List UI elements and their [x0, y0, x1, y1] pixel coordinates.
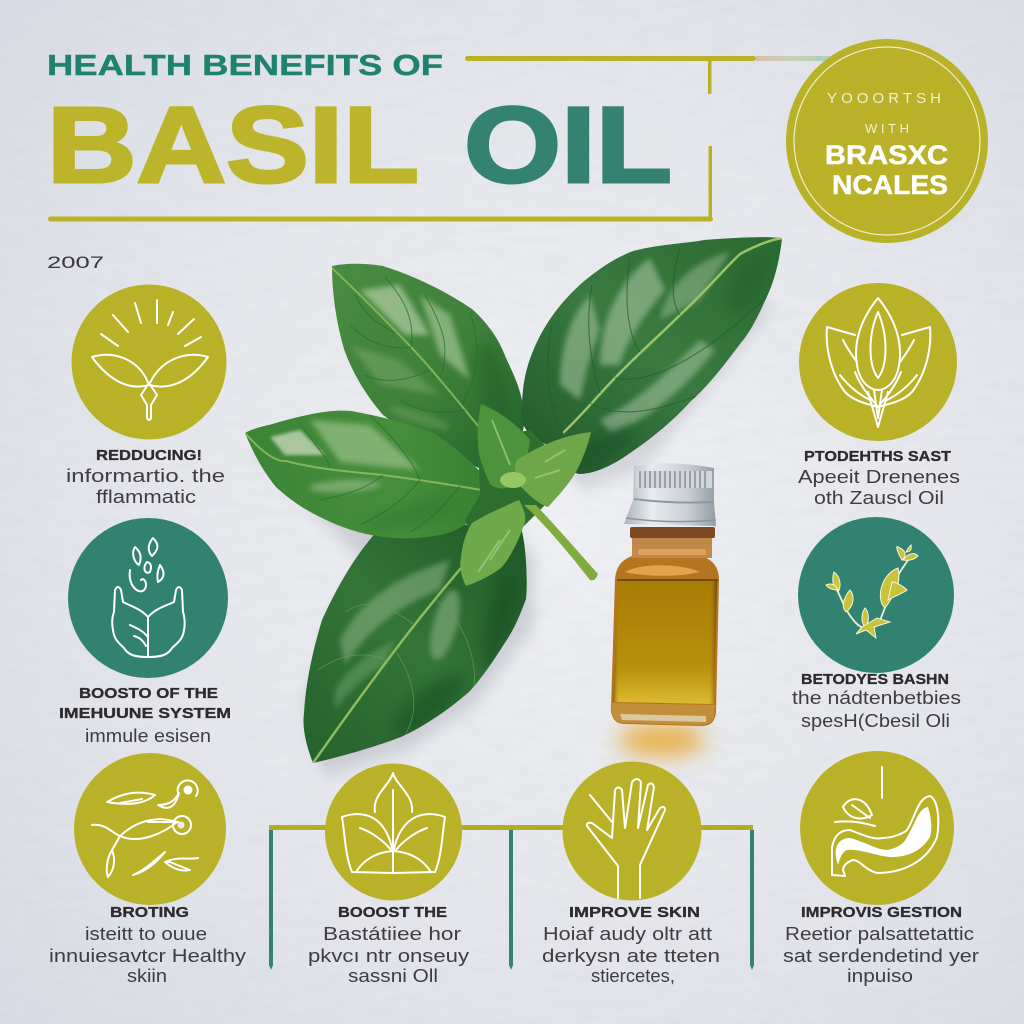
- subtitle: health benefits of: HEALTH BENEFITS OF: [47, 50, 443, 82]
- icon: hand: [562, 762, 702, 900]
- glass body: [611, 556, 719, 726]
- badge: BRASXC: [825, 140, 948, 170]
- leaf highlights: [478, 420, 565, 572]
- icon: stomach and leaf: [800, 751, 954, 905]
- panel: improve digestion: [783, 751, 979, 986]
- panel: reducing inflammation: fflammatic: [96, 487, 196, 507]
- icon: leaf cluster: [799, 283, 957, 441]
- highlight band: [625, 565, 700, 576]
- panel: improve digestion: sat serdendetind yer: [783, 946, 979, 966]
- glow under bottle: [618, 723, 706, 757]
- icon: leaf sprigs: [74, 753, 226, 905]
- panel: reducing inflammation: REDDUCING!: [96, 448, 202, 464]
- basil sprig: [240, 230, 790, 776]
- panel: boost the basil: sassni Oll: [348, 966, 438, 986]
- panel: protects: [798, 283, 960, 508]
- panel: boost the basil: Bastátiiee hor: [323, 924, 461, 944]
- panel: protects: oth Zauscl Oil: [814, 488, 944, 508]
- panel: boost immune system: BOOSTO OF THE: [79, 686, 218, 702]
- panel: boost immune system: [59, 518, 231, 746]
- year label: 2007: [47, 253, 104, 272]
- panel: boost immune system: immule esisen: [85, 726, 211, 746]
- panel: improve digestion: Reetior palsattetattic: [785, 924, 974, 944]
- oil bottle: [611, 463, 719, 757]
- badge: WITH: [865, 121, 909, 136]
- panel: protects: Apeeit Drenenes: [798, 467, 960, 487]
- title word: basil: BASIL: [47, 84, 419, 205]
- leaf: bottom: [304, 525, 527, 763]
- panel: botanical properties: BETODYES BASHN: [801, 672, 949, 688]
- sprig centre backing: [465, 430, 570, 560]
- panel: boost the basil: BOOOST THE: [338, 905, 447, 921]
- panel: botanical properties: the nádtenbetbies: [792, 688, 961, 708]
- oil liquid: [613, 581, 717, 704]
- panel: reducing inflammation: [66, 284, 226, 507]
- panel: improve skin: [542, 762, 720, 986]
- title word: oil: OIL: [464, 84, 672, 205]
- small leaf: lower: [460, 500, 525, 586]
- badge: [786, 39, 988, 243]
- sprig center bud: [500, 472, 526, 488]
- panel: botanical properties: [792, 517, 961, 731]
- small leaf: upper: [478, 404, 530, 488]
- panel: improve skin: stiercetes,: [591, 966, 675, 986]
- panel: protects: PTODEHTHS SAST: [804, 449, 951, 465]
- bottom connector: [269, 825, 754, 970]
- icon: hands and leaves: [68, 518, 228, 678]
- icon: leafy branch: [798, 517, 954, 673]
- badge: NCALES: [832, 170, 948, 200]
- panel: reducing inflammation: informartio. the: [66, 466, 225, 486]
- glass base: [612, 703, 715, 725]
- leaf: left: [245, 410, 480, 538]
- panel: improve skin: Hoiaf audy oltr att: [543, 924, 712, 944]
- amber neck: [630, 527, 715, 538]
- panel: improve digestion: inpuiso: [847, 966, 913, 986]
- panel: brightening skin: innuiesavtcr Healthy: [49, 946, 246, 966]
- panel: improve skin: derkysn ate tteten: [542, 946, 720, 966]
- small leaf: right: [515, 432, 591, 507]
- header frame lines: [48, 56, 830, 222]
- icon: sun and leaves: [72, 284, 226, 440]
- panel: improve digestion: IMPROVIS GESTION: [801, 905, 962, 921]
- panel: boost immune system: IMEHUUNE SYSTEM: [59, 706, 231, 722]
- panel: brightening skin: skiin: [127, 966, 167, 986]
- panel: botanical properties: spesH(Cbesil Oli: [801, 711, 950, 731]
- panel: brightening skin: BROTING: [110, 905, 189, 921]
- title: [47, 50, 672, 205]
- stem: [524, 505, 598, 580]
- icon: three leaves: [325, 764, 462, 900]
- leaf: top right: [522, 237, 782, 474]
- panel: improve skin: IMPROVE SKIN: [569, 905, 700, 921]
- panel: boost the basil: pkvcı ntr onseuy: [308, 946, 469, 966]
- panel: brightening skin: isteitt to ouue: [85, 924, 207, 944]
- metal cap: [624, 463, 716, 526]
- panel: brightening skin: [49, 753, 246, 986]
- panel: boost the basil: [308, 764, 469, 986]
- leaf: top left: [332, 264, 524, 468]
- badge: YOOORTSH: [827, 90, 941, 107]
